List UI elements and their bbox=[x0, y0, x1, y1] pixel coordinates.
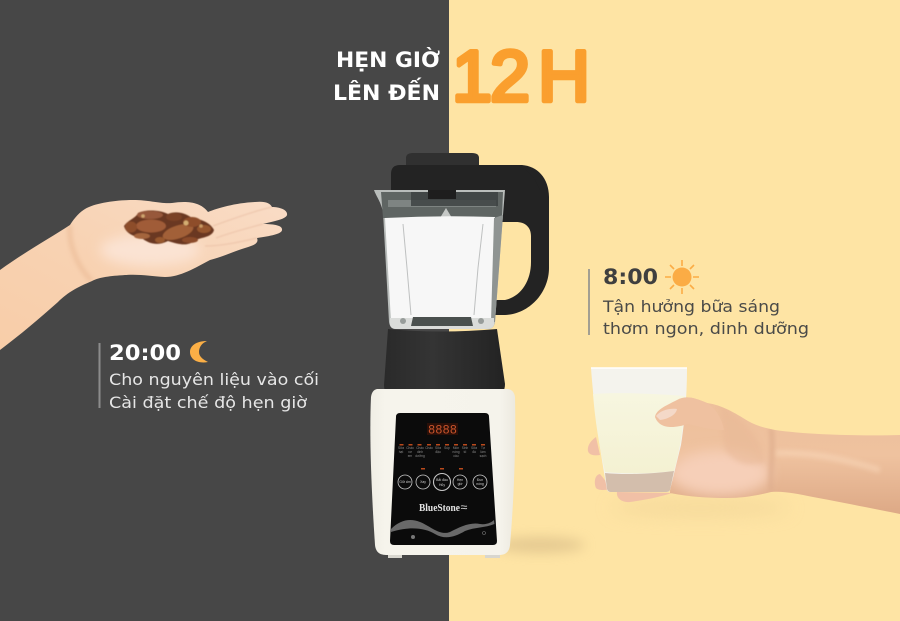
heading: timer up to 12H bbox=[333, 37, 590, 117]
brand logo: BlueStone bbox=[419, 503, 460, 514]
button labels: Đun bbox=[477, 478, 483, 482]
thumb nail bbox=[656, 409, 677, 420]
icon: crescent moon bbox=[190, 341, 208, 362]
photo: left hand holding pecans bbox=[0, 200, 287, 350]
button labels: Hủy bbox=[439, 483, 445, 487]
program labels: dinh bbox=[417, 450, 423, 454]
button labels: Xay bbox=[420, 480, 426, 484]
program labels: dưỡng bbox=[415, 454, 425, 458]
handle bbox=[492, 165, 549, 315]
program labels: em bbox=[408, 454, 413, 458]
program labels: Sinh bbox=[462, 446, 468, 450]
control panel bbox=[390, 413, 497, 545]
shadow: blender on the yellow side bbox=[495, 537, 585, 553]
hand and forearm bbox=[655, 397, 900, 514]
program labels: Súp bbox=[444, 446, 450, 450]
dark motor collar bbox=[384, 329, 505, 395]
fingers behind the glass bbox=[588, 437, 672, 502]
LED display bbox=[427, 423, 458, 435]
icon: sun bbox=[665, 260, 699, 294]
program labels: nóng bbox=[452, 450, 460, 454]
program labels: đá bbox=[472, 450, 476, 454]
callout: 8:00 morning step bbox=[588, 260, 809, 338]
lid bbox=[391, 153, 540, 190]
button labels: Hẹn bbox=[457, 478, 463, 482]
program labels: tố bbox=[464, 450, 467, 454]
wave graphic bbox=[391, 520, 494, 537]
program labels: làm bbox=[480, 450, 486, 454]
control buttons bbox=[398, 474, 487, 490]
program labels: sạch bbox=[480, 454, 487, 458]
button labels: nóng bbox=[476, 482, 484, 486]
program labels: Món bbox=[453, 446, 459, 450]
white base bbox=[370, 389, 515, 555]
nuts: pecans in the palm bbox=[124, 210, 214, 244]
button labels: Bắt đầu bbox=[436, 477, 448, 482]
program labels: Sữa bbox=[435, 446, 441, 450]
panel: dark night background bbox=[0, 0, 449, 621]
divider bar bbox=[98, 343, 100, 408]
time label 8:00: 8:00 bbox=[603, 265, 658, 289]
button labels: giờ bbox=[458, 482, 463, 486]
text: tasty and nutritious: thơm ngon, dinh dưỡng bbox=[603, 319, 809, 338]
callout: 20:00 evening step bbox=[98, 341, 319, 412]
photo: right hand holding glass of milk bbox=[588, 368, 900, 516]
program labels: xơ bbox=[408, 450, 412, 454]
program labels: Cháo bbox=[406, 446, 414, 450]
button labels: Giữ ấm bbox=[399, 480, 411, 484]
button labels bbox=[399, 477, 484, 487]
text: enjoy breakfast: Tận hưởng bữa sáng bbox=[602, 297, 780, 316]
program labels: Cháo bbox=[416, 446, 424, 450]
hand shading bbox=[672, 429, 880, 498]
program labels: Sữa bbox=[398, 446, 404, 450]
product: blender bbox=[370, 153, 549, 558]
program labels bbox=[398, 446, 487, 458]
heading line: HẸN GIỜ: HẸN GIỜ bbox=[336, 47, 440, 72]
thumb over the glass bbox=[655, 397, 724, 430]
program indicators bbox=[400, 444, 485, 470]
text: add ingredients: Cho nguyên liệu vào cối bbox=[109, 370, 319, 389]
text: set the timer: Cài đặt chế độ hẹn giờ bbox=[109, 393, 307, 412]
program labels: hạt bbox=[399, 450, 403, 454]
program labels: cầu bbox=[453, 454, 459, 458]
panel: yellow morning background bbox=[449, 0, 900, 621]
program labels: Tự bbox=[481, 446, 486, 450]
program labels: đậu bbox=[435, 450, 441, 454]
heading number: 12H: 12H bbox=[452, 37, 590, 117]
program labels: Cháo bbox=[425, 446, 433, 450]
control panel: 8888 bbox=[428, 422, 457, 438]
time label 20:00: 20:00 bbox=[109, 341, 181, 365]
glass jar bbox=[374, 190, 505, 329]
divider bar bbox=[588, 269, 590, 335]
heading line: LÊN ĐẾN: LÊN ĐẾN bbox=[333, 77, 440, 105]
glass of milk bbox=[591, 368, 687, 492]
program labels: Sữa bbox=[471, 446, 477, 450]
